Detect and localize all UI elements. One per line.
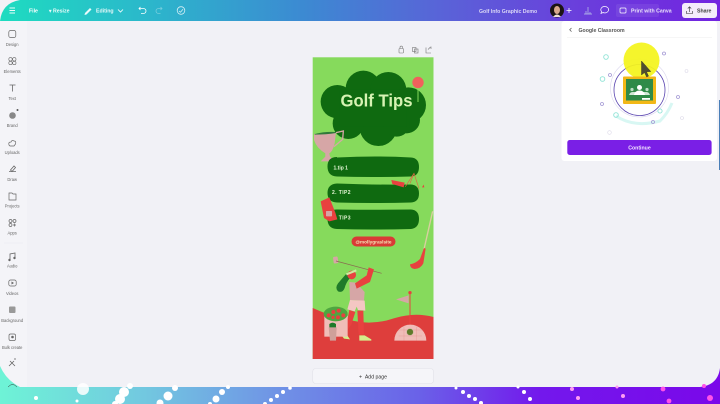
- red ground hill: [313, 308, 434, 359]
- nav item: draw: Draw: [7, 177, 17, 182]
- illustration: cursor highlight: [624, 42, 660, 78]
- handle badge: [352, 236, 396, 246]
- nav item: brand: Brand: [7, 123, 18, 128]
- nav item: text: Text: [8, 96, 17, 101]
- file menu: File: [29, 8, 38, 14]
- nav item: elements: Elements: [4, 69, 21, 74]
- illustration: trophy: [314, 131, 343, 161]
- panel: google classroom share: [562, 21, 717, 161]
- right edge strip: [719, 100, 720, 170]
- illustration: golfer: [333, 256, 382, 341]
- illustration: basket of balls: [324, 307, 348, 341]
- nav item: audio: [7, 253, 18, 268]
- illustration: golf bag and clubs tripod: [391, 173, 424, 189]
- nav item: videos: [6, 280, 18, 296]
- nav item: draw: [7, 166, 17, 182]
- continue button: Continue: [628, 146, 651, 152]
- panel header: Google Classroom: [578, 28, 625, 34]
- resize menu: ▾ Resize: [48, 8, 70, 14]
- nav item: projects: [5, 193, 20, 208]
- print with canva button: [616, 4, 672, 17]
- nav item: uploads: [5, 140, 20, 155]
- top toolbar: [0, 0, 720, 21]
- nav item: more tools: [9, 358, 15, 366]
- icon: stats: [584, 7, 592, 14]
- nav item: audio: Audio: [7, 264, 18, 268]
- tip pill 3: [328, 210, 419, 230]
- icon: mouse cursor: [642, 61, 651, 77]
- tip pill 2: 2. TIP2: [332, 190, 351, 196]
- nav item: bulk create: [2, 334, 23, 350]
- nav item: text: [8, 85, 17, 101]
- avatar: [550, 4, 564, 18]
- tip pill 1: [328, 156, 419, 177]
- page toolbar icons: [399, 46, 431, 53]
- title: Golf Tips: [340, 90, 413, 110]
- icon: chevron: [118, 10, 123, 12]
- nav item: design: [6, 30, 19, 47]
- nav item: background: Background: [1, 318, 24, 323]
- icon: redo: [156, 7, 162, 14]
- print with canva button: Print with Canva: [631, 8, 672, 14]
- illustration: flag and hole: [394, 291, 426, 341]
- icon: menu: [10, 8, 15, 13]
- share button: Share: [697, 8, 712, 14]
- handle badge: @mollygraslsite: [355, 239, 392, 244]
- design page: golf tips: [313, 57, 434, 359]
- icon: google classroom: [623, 76, 656, 104]
- tip pill 2: [328, 184, 419, 203]
- document title: Golf Info Graphic Demo: [479, 9, 537, 15]
- nav item: apps: [8, 220, 17, 236]
- icon: cloud saved: [177, 7, 185, 14]
- continue button: [567, 140, 712, 155]
- icon: golf ball on tee: [412, 77, 424, 102]
- icon: pencil: [84, 8, 92, 15]
- editing menu: Editing: [96, 8, 114, 14]
- illustration: red golf glove: [321, 197, 337, 221]
- nav item: elements: [4, 58, 21, 74]
- nav item: videos: Videos: [6, 291, 18, 296]
- nav item: background: [1, 306, 24, 323]
- nav item: uploads: Uploads: [5, 150, 20, 155]
- add page button: [313, 368, 434, 384]
- tip pill 1: 1.tip 1: [334, 166, 348, 172]
- nav item: design: Design: [6, 42, 19, 47]
- add page button: + Add page: [359, 374, 387, 380]
- nav item: apps: Apps: [8, 230, 17, 236]
- icon: comment: [601, 6, 609, 14]
- left sidebar: [0, 21, 27, 387]
- bottom decorative gradient strip: [0, 366, 720, 404]
- icon: add member: [566, 8, 572, 13]
- tip pill 3: 3. TIP3: [332, 216, 351, 222]
- illustration: golf club: [410, 211, 433, 269]
- nav item: bulk create: Bulk create: [2, 345, 23, 350]
- nav item: brand: [7, 109, 18, 128]
- share button: [682, 3, 717, 18]
- illustration: rings and dots: [600, 52, 688, 134]
- nav item: projects: Projects: [5, 204, 20, 208]
- cloud heading shape: [321, 71, 426, 146]
- icon: undo: [139, 7, 146, 14]
